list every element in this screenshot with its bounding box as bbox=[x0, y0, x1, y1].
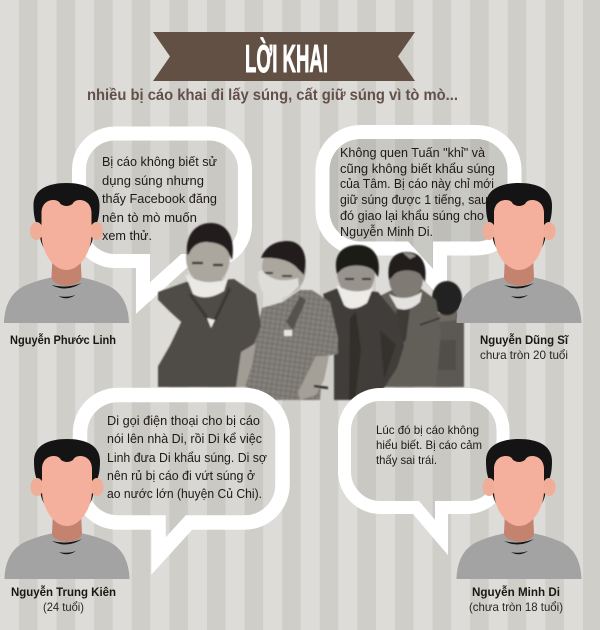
person icon: Nguyễn Trung Kiên bbox=[4, 439, 130, 579]
name and age: Nguyễn Minh Di: Nguyễn Minh Di bbox=[472, 584, 560, 599]
title ribbon bbox=[153, 32, 415, 81]
statement text: Di bbox=[376, 423, 482, 467]
speech bubble: bottom right bbox=[344, 394, 503, 538]
statement text: Sĩ: cũng không biết khẩu súng bbox=[340, 161, 495, 176]
statement text: Kiên bbox=[107, 413, 267, 501]
speech bubble: top right bbox=[322, 132, 514, 287]
statement text: Sĩ: của Tâm. Bị cáo này chỉ mới bbox=[340, 176, 494, 191]
name and age: Nguyễn Dũng Sĩ bbox=[480, 332, 569, 362]
person icon: Nguyễn Dũng Sĩ bbox=[456, 183, 582, 323]
name and age: Nguyễn Minh Di: (chưa tròn 18 tuổi) bbox=[469, 600, 563, 614]
statement text: Sĩ: giữ súng được 1 tiếng, sau bbox=[340, 192, 488, 207]
statement text: Linh: xem thử. bbox=[102, 228, 152, 243]
statement text: Linh bbox=[102, 154, 217, 243]
man 1 bbox=[158, 223, 261, 387]
subtitle: nhiều bị cáo khai đi lấy súng, cất giữ súng vì tò mò... bbox=[87, 87, 458, 104]
statement text: Kiên: nói lên nhà Di, rồi Di kể việc bbox=[107, 431, 262, 446]
statement text: Di: Lúc đó bị cáo không bbox=[376, 423, 479, 437]
name and age: Nguyễn Trung Kiên: (24 tuổi) bbox=[43, 600, 84, 614]
speech bubble: bottom left bbox=[80, 395, 282, 556]
man 5 behind bbox=[428, 281, 464, 387]
speech bubble: top left bbox=[79, 134, 245, 298]
statement text: Kiên: nên rủ bị cáo đi vứt súng ở bbox=[107, 468, 255, 483]
name and age: Nguyễn Minh Di bbox=[469, 584, 563, 614]
statement text: Linh: nên tò mò muốn bbox=[102, 210, 197, 225]
statement text: Sĩ: đó giao lại khẩu súng cho bbox=[340, 208, 484, 223]
name and age: Nguyễn Trung Kiên bbox=[11, 584, 116, 614]
photo: defendants bbox=[158, 223, 464, 400]
statement text: Linh: thấy Facebook đăng bbox=[102, 191, 217, 206]
statement text: Kiên: Di gọi điện thoại cho bị cáo bbox=[107, 413, 260, 428]
statement text: Kiên: ao nước lớn (huyện Củ Chi). bbox=[107, 486, 262, 501]
statement text: Sĩ: Nguyễn Minh Di. bbox=[340, 224, 433, 239]
statement text: Di: hiểu biết. Bị cáo cảm bbox=[376, 438, 482, 452]
title ribbon: LỜI KHAI bbox=[245, 37, 328, 81]
statement text: Linh: Bị cáo không biết sử bbox=[102, 154, 217, 169]
name: Nguyễn Phước Linh: Nguyễn Phước Linh bbox=[10, 332, 116, 347]
statement text: Di: thấy sai trái. bbox=[376, 453, 437, 467]
name and age: Nguyễn Dũng Sĩ: Nguyễn Dũng Sĩ bbox=[480, 332, 569, 347]
person icon: Nguyễn Minh Di bbox=[456, 439, 582, 579]
man 4 bbox=[372, 252, 441, 387]
statement text: Sĩ: Không quen Tuấn "khỉ" và bbox=[340, 145, 486, 160]
man 3 bbox=[323, 245, 404, 400]
name and age: Nguyễn Dũng Sĩ: chưa tròn 20 tuổi bbox=[480, 348, 568, 362]
name and age: Nguyễn Trung Kiên: Nguyễn Trung Kiên bbox=[11, 584, 116, 599]
statement text: Sĩ bbox=[340, 145, 495, 239]
man 2 bbox=[243, 241, 338, 400]
person icon: Nguyễn Phước Linh bbox=[4, 183, 129, 323]
statement text: Kiên: Linh đưa Di khẩu súng. Di sợ bbox=[107, 450, 267, 465]
statement text: Linh: dụng súng nhưng bbox=[102, 173, 204, 188]
